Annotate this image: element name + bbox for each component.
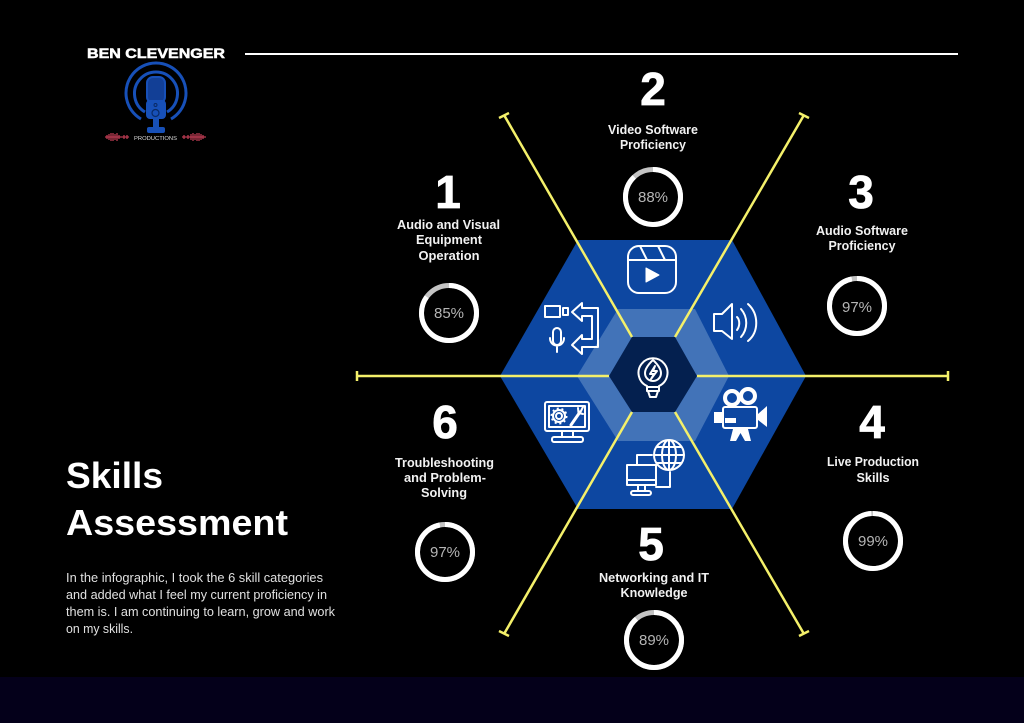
logo waveform left bbox=[105, 133, 129, 141]
skill 6: 97% bbox=[430, 544, 460, 561]
description: them is. I am continuing to learn, grow and work bbox=[66, 605, 336, 619]
skill 2: 88% bbox=[638, 189, 668, 206]
skill 6: and Problem- bbox=[404, 470, 486, 485]
outer hexagon bbox=[500, 240, 806, 509]
skill 3: Audio Software bbox=[816, 223, 908, 238]
footer band bbox=[0, 677, 1024, 723]
description: on my skills. bbox=[66, 622, 133, 636]
skill 3: 3 bbox=[848, 166, 874, 218]
middle hexagon bbox=[577, 309, 729, 441]
skill 4: 99% bbox=[858, 533, 888, 550]
skill 2 bbox=[608, 63, 698, 224]
skill 1: 85% bbox=[434, 305, 464, 322]
skill 4 bbox=[827, 396, 919, 568]
skill 5: Networking and IT bbox=[599, 570, 709, 585]
skill 1: Equipment bbox=[416, 232, 483, 247]
skill 4: 4 bbox=[859, 396, 885, 448]
skill 4: Skills bbox=[856, 470, 890, 485]
icon: monitor with tools bbox=[545, 402, 589, 442]
skill 3: 97% bbox=[842, 299, 872, 316]
skill 5: Knowledge bbox=[620, 585, 688, 600]
skill 1: Operation bbox=[418, 248, 480, 263]
skill 1: Audio and Visual bbox=[397, 217, 500, 232]
icon: network globe bbox=[627, 440, 684, 495]
skill 6 bbox=[395, 396, 494, 580]
logo productions text: PRODUCTIONS bbox=[134, 136, 177, 142]
skill 6: Solving bbox=[421, 485, 467, 500]
yellow spokes bbox=[357, 113, 948, 636]
icon: video play bbox=[628, 246, 676, 293]
skill 5: 89% bbox=[639, 632, 669, 649]
icon: AV equipment arrows bbox=[545, 303, 598, 354]
skill 6: 6 bbox=[432, 396, 458, 448]
skill 1: 1 bbox=[435, 166, 461, 218]
skill 2: Proficiency bbox=[620, 137, 687, 152]
title: Skills bbox=[66, 455, 163, 496]
skill 2: 2 bbox=[640, 63, 666, 115]
skill 3: Proficiency bbox=[828, 238, 896, 253]
icon: light bulb bbox=[639, 358, 668, 397]
skill 4: Live Production bbox=[827, 454, 919, 469]
logo: microphone bbox=[105, 63, 206, 142]
description: and added what I feel my current proficiency in bbox=[66, 588, 327, 602]
skill 3 bbox=[816, 166, 908, 334]
title: Assessment bbox=[66, 502, 288, 543]
skill 2: Video Software bbox=[608, 122, 698, 137]
icon: speaker bbox=[714, 304, 756, 341]
description bbox=[66, 571, 336, 636]
header rule bbox=[245, 53, 958, 55]
skill 5 bbox=[599, 518, 709, 668]
skill 5: 5 bbox=[638, 518, 664, 570]
title bbox=[66, 455, 288, 543]
skill 6: Troubleshooting bbox=[395, 455, 494, 470]
brand name: BEN CLEVENGER bbox=[87, 46, 225, 61]
logo waveform right bbox=[182, 133, 206, 141]
description: In the infographic, I took the 6 skill categories bbox=[66, 571, 323, 585]
inner hexagon bbox=[609, 337, 697, 412]
skill 1 bbox=[397, 166, 500, 340]
icon: film camera bbox=[714, 389, 767, 441]
